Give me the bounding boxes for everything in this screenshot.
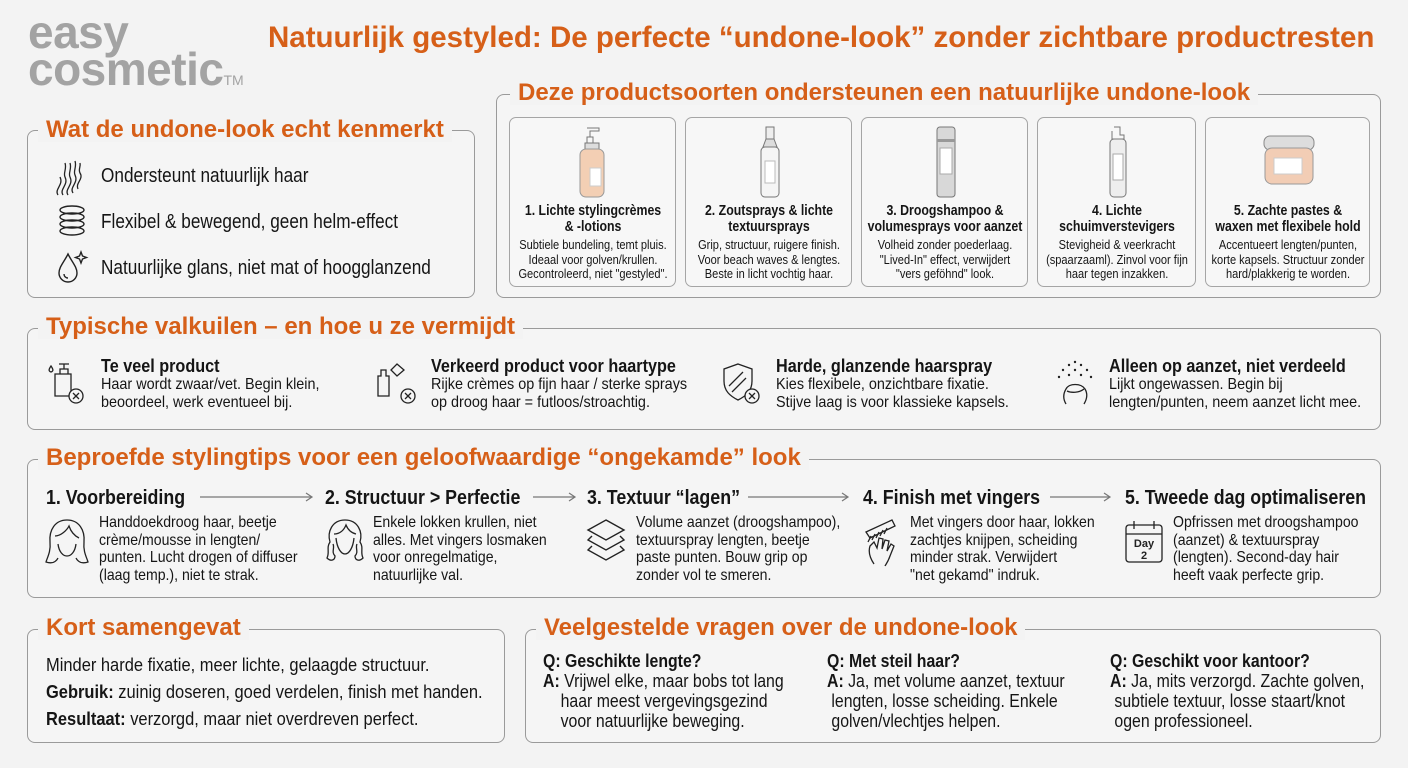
step 5 [1125,487,1366,584]
valkuil 4: Lijkt ongewassen. Begin bij [1109,376,1283,393]
step 2: 2. Structuur > Perfectie [325,487,520,509]
logo: easy [28,6,128,58]
faq 2 [827,651,1065,731]
faq 1: A: Vrijwel elke, maar bobs tot lang [543,671,784,691]
valkuil 2: op droog haar = futloos/stroachtig. [431,394,650,411]
faq 1 [543,651,784,731]
heading: valkuilen: Typische valkuilen – en hoe u ze vermijdt [46,313,515,340]
icon: drop [58,250,88,283]
kenmerken list: Flexibel & bewegend, geen helm-effect [101,211,398,233]
title: Natuurlijk gestyled: De perfecte “undone-look” zonder zichtbare productresten [268,21,1374,54]
card 5: korte kapsels. Structuur zonder [1211,252,1364,266]
card 2: Voor beach waves & lengtes. [697,252,840,266]
step 1: punten. Lucht drogen of diffuser [99,549,298,566]
arrow 4 [1050,492,1111,502]
icon: pump bottle [580,128,604,198]
heading: kenmerken: Wat de undone-look echt kenmerkt [46,116,444,143]
card 1: Subtiele bundeling, temt pluis. [519,237,666,252]
step 5: Opfrissen met droogshampoo [1173,514,1358,531]
faq 3 [1110,651,1364,731]
step 4: minder strak. Verwijdert [910,549,1057,566]
panel: samenvatting [27,629,505,743]
faq 3: Q: Geschikt voor kantoor? [1110,651,1310,671]
heading: FAQ: Veelgestelde vragen over de undone-look [544,614,1017,641]
card 2: 2. Zoutsprays & lichte [704,203,833,219]
card 3: "Lived-In" effect, verwijdert [879,252,1010,266]
step 4: Met vingers door haar, lokken [910,514,1095,531]
card 1 [509,117,676,287]
step 3: paste punten. Bouw grip op [636,549,807,566]
step 2: Enkele lokken krullen, niet [373,514,537,531]
icon: spray bottle [760,126,780,198]
samenvatting text: Gebruik: zuinig doseren, goed verdelen, finish met handen. [46,681,483,702]
card 5 [1205,117,1370,287]
valkuil 1: Te veel product [101,356,220,376]
icon: woman head [45,519,89,564]
faq 2: A: Ja, met volume aanzet, textuur [827,671,1065,691]
card 5: 5. Zachte pastes & [1233,203,1342,219]
step 4: 4. Finish met vingers [863,487,1040,509]
faq 1: haar meest vergevingsgezind [561,691,768,711]
card 1: Gecontroleerd, niet "gestyled". [518,266,667,281]
faq 1: Q: Geschikte lengte? [543,651,701,671]
valkuil 3: Stijve laag is voor klassieke kapsels. [776,394,1009,411]
valkuil 2: Verkeerd product voor haartype [431,356,676,376]
step 1: crème/mousse in lengten/ [99,532,260,548]
card 3: Volheid zonder poederlaag. [877,237,1012,252]
card 1: Ideaal voor golven/krullen. [528,252,657,266]
logo: cosmeticTM [28,43,244,95]
valkuil 3: Kies flexibele, onzichtbare fixatie. [776,376,989,393]
card 2: textuursprays [728,218,809,234]
card 5: Accentueert lengten/punten, [1218,237,1357,252]
kenmerken list [56,160,431,283]
samenvatting text: Minder harde fixatie, meer lichte, gelaagde structuur. [46,654,429,675]
valkuil 1 [48,356,320,411]
step 3: 3. Textuur “lagen” [587,487,740,509]
step 1: Handdoekdroog haar, beetje [99,514,277,531]
step 3: textuurspray lengten, beetje [636,532,810,548]
panel: stylingtips [27,459,1381,598]
card 5: waxen met flexibele hold [1215,218,1360,234]
card 1: & -lotions [564,218,621,234]
valkuil 2 [377,356,687,411]
arrow 1 [200,492,313,502]
icon: calendar day 2 [1125,521,1163,563]
icon: hand with comb [865,519,896,566]
step 5: 5. Tweede dag optimaliseren [1125,487,1366,509]
icon: curly hair head [326,519,364,561]
icon: calendar day 2: Day [1134,538,1155,550]
faq 2: golven/vlechtjes helpen. [831,711,1000,731]
samenvatting text [46,654,483,729]
card 1: 1. Lichte stylingcrèmes [524,203,661,219]
icon: calendar day 2: 2 [1141,550,1147,562]
icon: mousse can [1110,126,1126,198]
valkuil 2: Rijke crèmes op fijn haar / sterke sprays [431,376,687,393]
heading: stylingtips: Beproefde stylingtips voor een geloofwaardige “ongekamde” look [46,444,801,471]
panel: FAQ [525,629,1381,743]
step 4: zachtjes knijpen, scheiding [910,532,1078,548]
step 5: (lengten). Second-day hair [1173,549,1339,566]
step 2: alles. Met vingers losmaken [373,532,547,548]
icon: head with dots [1058,360,1092,404]
card 2: Grip, structuur, ruigere finish. [698,237,839,252]
faq 3: subtiele textuur, losse staart/knot [1114,691,1345,711]
valkuil 3: Harde, glanzende haarspray [776,356,992,376]
card 4: 4. Lichte [1091,203,1141,219]
step 2 [325,487,547,584]
valkuil 3 [723,356,1009,411]
card 4: haar tegen inzakken. [1065,266,1168,281]
step 1: (laag temp.), niet te strak. [99,566,259,584]
faq 2: lengten, losse scheiding. Enkele [831,691,1058,711]
icon: hair waves [56,160,82,196]
step 1 [45,487,298,584]
step 4: "net gekamd" indruk. [910,566,1040,584]
card 3: 3. Droogshampoo & [886,203,1003,219]
arrow 3 [748,492,849,502]
step 4 [863,487,1095,584]
card 4 [1037,117,1196,287]
step 3: zonder vol te smeren. [636,566,771,584]
icon: layers [586,519,626,561]
icon: bottle with x [48,363,84,404]
panel: kenmerken [27,130,475,298]
icon: shield x [723,363,760,404]
valkuil 4: lengten/punten, neem aanzet licht mee. [1109,394,1361,411]
valkuil 4: Alleen op aanzet, niet verdeeld [1109,356,1346,376]
icon: wrong product [377,363,416,404]
step 2: voor onregelmatige, [373,549,497,566]
card 4: (spaarzaaml). Zinvol voor fijn [1046,252,1187,266]
step 3 [586,487,840,584]
step 5: heeft vaak perfecte grip. [1173,566,1324,584]
step 5: (aanzet) & textuurspray [1173,532,1319,548]
heading: productsoorten: Deze productsoorten ondersteunen een natuurlijke undone-look [518,79,1250,106]
heading: samenvatting: Kort samengevat [46,614,241,641]
card 2: Beste in licht vochtig haar. [704,266,833,281]
card 3: volumesprays voor aanzet [867,218,1022,234]
card 3: "vers geföhnd" look. [895,266,994,281]
faq 3: A: Ja, mits verzorgd. Zachte golven, [1110,671,1364,691]
icon: aerosol can [936,126,956,198]
step 3: Volume aanzet (droogshampoo), [636,514,840,531]
icon: coil [59,205,85,236]
valkuil 1: beoordeel, werk eventueel bij. [101,394,292,411]
samenvatting text: Resultaat: verzorgd, maar niet overdreven perfect. [46,708,418,729]
card 5: hard/plakkerig te worden. [1225,266,1350,281]
logo [28,6,244,95]
faq 1: voor natuurlijke beweging. [561,711,745,731]
panel: valkuilen [27,328,1381,430]
icon: jar [1264,136,1314,184]
step 2: natuurlijke val. [373,566,463,584]
card 3 [861,117,1028,287]
card 4: Stevigheid & veerkracht [1058,237,1175,252]
card 2 [685,117,852,287]
kenmerken list: Natuurlijke glans, niet mat of hoogglanzend [101,257,431,279]
step 1: 1. Voorbereiding [46,487,185,509]
arrow 2 [533,492,576,502]
valkuil 4 [1058,356,1361,411]
valkuil 1: Haar wordt zwaar/vet. Begin klein, [101,376,320,393]
kenmerken list: Ondersteunt natuurlijk haar [101,165,308,187]
card 4: schuimverstevigers [1059,218,1174,234]
panel: productsoorten [496,94,1381,298]
faq 2: Q: Met steil haar? [827,651,960,671]
faq 3: ogen professioneel. [1114,711,1253,731]
